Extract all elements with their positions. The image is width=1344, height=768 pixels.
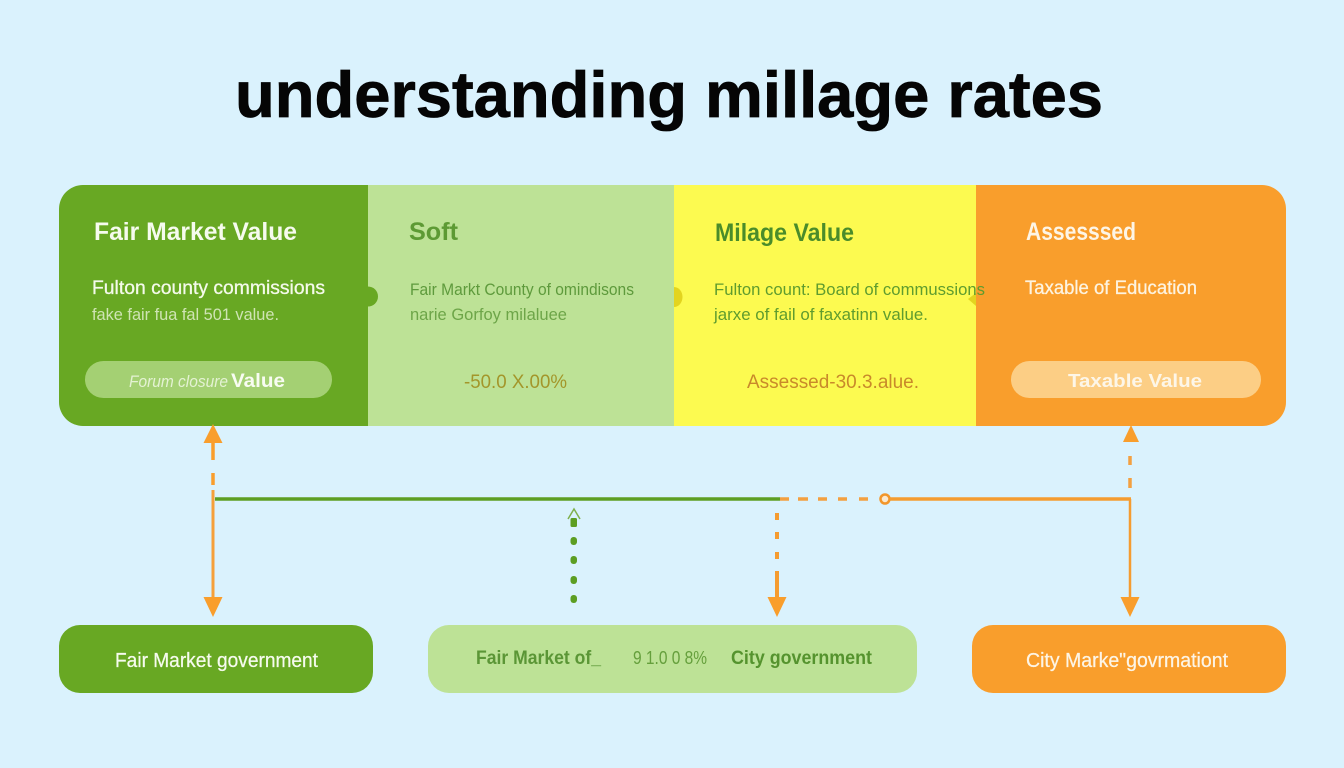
heading: milage value: Milage Value xyxy=(715,219,854,247)
text block: soft xyxy=(410,281,634,324)
text block: soft: Fair Markt County of omindisons xyxy=(410,281,634,299)
heading: soft: Soft xyxy=(409,218,459,246)
connector: green dotted up arrow xyxy=(568,509,580,603)
panel: assessed xyxy=(976,185,1286,426)
heading: fair market value: Fair Market Value xyxy=(94,218,297,246)
connector: left double-headed arrow xyxy=(204,424,222,617)
value: milage value: Assessed-30.3.alue. xyxy=(747,372,919,393)
connector notch: green xyxy=(368,286,378,306)
pill: fair market value xyxy=(85,361,332,398)
panel: milage value xyxy=(674,185,976,426)
connector: right double-headed arrow xyxy=(1120,425,1140,617)
text block: milage value: Fulton count: Board of commussions xyxy=(714,281,985,299)
text block: milage value: jarxe of fail of faxatinn value. xyxy=(713,306,928,324)
box: fair market government xyxy=(59,625,373,693)
pill: taxable value: Taxable Value xyxy=(1068,370,1202,391)
connector notch: yellow xyxy=(674,287,682,307)
connector notch: orange xyxy=(968,293,976,306)
text block: assessed: Taxable of Education xyxy=(1025,277,1197,299)
panel: fair market value xyxy=(59,185,368,426)
box: city market government xyxy=(972,625,1286,693)
connector: green horizontal line xyxy=(215,497,780,501)
box: city government: 9 1.0 0 8% xyxy=(633,648,707,668)
text block: milage value xyxy=(713,281,985,324)
connector: orange dashed line with node xyxy=(780,494,1131,504)
panel: soft xyxy=(368,185,674,426)
title: understanding millage rates xyxy=(235,58,1103,131)
pill: fair market value: Forum closure xyxy=(129,372,228,391)
box: fair market government: Fair Market government xyxy=(115,650,318,672)
text block: fair market value: Fulton county commissions xyxy=(92,277,325,299)
text block: fair market value: fake fair fua fal 501 value. xyxy=(92,306,279,324)
pill: taxable value xyxy=(1011,361,1261,398)
panel: value stages band xyxy=(59,185,1286,426)
connector: orange dashed down arrow xyxy=(768,513,786,617)
box: city government: Fair Market of_ xyxy=(476,648,601,669)
pill: fair market value: Value xyxy=(231,371,285,392)
text block: fair market value xyxy=(92,277,325,324)
box: city government: City government xyxy=(731,648,873,669)
text block: soft: narie Gorfoy milaluee xyxy=(410,306,567,324)
value: soft: -50.0 X.00% xyxy=(464,372,567,393)
heading: assessed: Assesssed xyxy=(1026,218,1136,246)
box: city market government: City Marke"govrmationt xyxy=(1026,650,1228,672)
box: city government xyxy=(428,625,917,693)
